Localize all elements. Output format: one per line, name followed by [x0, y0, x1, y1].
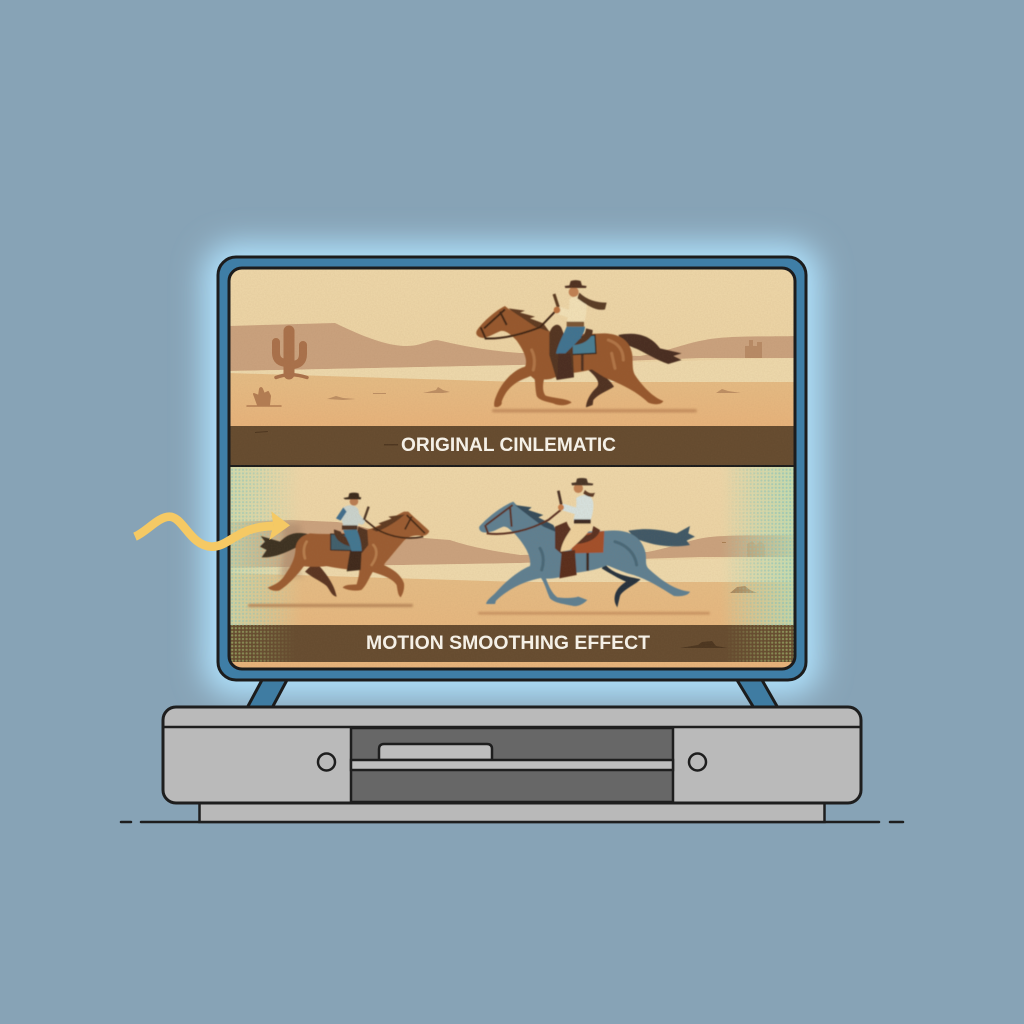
horse body	[268, 512, 429, 597]
shrub left	[247, 388, 281, 406]
belt blue rider	[574, 519, 591, 524]
bar mark	[255, 431, 398, 446]
screen border	[229, 268, 795, 669]
jeans small	[343, 529, 362, 552]
edge tint right	[720, 467, 796, 625]
tv bezel	[218, 257, 806, 680]
belt	[567, 322, 584, 327]
sky	[230, 270, 794, 371]
bar tuft lower	[680, 641, 728, 648]
saddle small	[334, 527, 368, 553]
console top edge line	[164, 726, 860, 728]
jeans	[556, 327, 585, 355]
bridle and reins	[481, 309, 555, 339]
label bar top	[228, 426, 796, 465]
scarf	[336, 507, 347, 521]
cactus	[276, 331, 307, 378]
halftone right	[725, 467, 796, 625]
arm small	[355, 513, 362, 522]
arm	[559, 311, 577, 316]
halftone left	[228, 467, 298, 625]
desert ground	[228, 373, 796, 426]
muscle shading blue	[540, 542, 637, 570]
halftone bar right	[725, 625, 796, 662]
console base	[200, 801, 824, 822]
saddle	[549, 325, 593, 380]
brown horse with rider	[476, 280, 682, 407]
boot	[558, 352, 566, 356]
small brown horse with rider	[260, 493, 429, 597]
trousers	[561, 523, 592, 552]
bridle and reins small	[365, 515, 425, 538]
hair blue rider	[583, 490, 595, 497]
hat	[565, 280, 587, 288]
shirt small	[341, 505, 359, 526]
ghost image of horse	[280, 524, 305, 577]
wavy yellow arrow	[135, 511, 290, 547]
panel divider	[230, 465, 794, 467]
ground tuft lower	[722, 542, 757, 593]
device on shelf	[379, 744, 492, 760]
belt small	[342, 525, 357, 530]
arm blue rider	[564, 507, 582, 513]
whip blue rider	[558, 491, 561, 505]
distant mesa lower	[228, 520, 796, 568]
hand blue rider	[558, 504, 564, 510]
right cactus distant	[745, 340, 762, 358]
saddle blanket	[570, 335, 596, 355]
muscle highlights	[532, 340, 623, 370]
head blue rider	[574, 484, 583, 493]
saddle blanket small	[331, 534, 353, 551]
hand	[554, 307, 560, 313]
head small	[350, 497, 358, 506]
far hind leg	[305, 562, 337, 597]
blue horse with rider	[479, 478, 695, 607]
halftone bar left	[228, 625, 298, 662]
saddle blue	[555, 522, 600, 554]
hat small	[343, 493, 361, 499]
cinch strap	[580, 354, 584, 372]
whip small	[364, 507, 369, 520]
screen texture	[228, 268, 796, 670]
boot blue rider	[559, 550, 577, 578]
bridle and reins blue	[485, 505, 561, 534]
mane	[508, 308, 549, 332]
ground line	[121, 821, 903, 823]
media console	[121, 707, 903, 822]
mane blue	[515, 505, 557, 533]
horse body	[476, 306, 663, 407]
tail blue	[628, 526, 695, 546]
label bar lower	[228, 625, 796, 662]
panel: motion smoothing	[228, 467, 796, 670]
mane small	[372, 514, 405, 532]
label: motion smoothing: MOTION SMOOTHING EFFECT	[366, 632, 650, 654]
left door knob	[318, 754, 335, 770]
tail with motion trail	[260, 533, 312, 557]
light sand band	[231, 365, 794, 382]
horse body blue	[479, 502, 690, 606]
tv stand legs	[247, 680, 778, 708]
right door knob	[689, 754, 706, 770]
console body	[163, 707, 861, 803]
blue horse shadow	[478, 612, 710, 614]
edge tint left	[228, 467, 303, 625]
shelf	[351, 760, 673, 770]
head	[569, 287, 579, 297]
muscle highlights small	[304, 542, 376, 565]
ghost cactus	[747, 541, 765, 557]
light sand band lower	[266, 562, 726, 582]
label: original: ORIGINAL CINLEMATIC	[401, 434, 616, 456]
far hind leg	[586, 365, 614, 407]
tail	[618, 334, 682, 364]
backlight glow	[214, 254, 810, 686]
cinch blue	[584, 553, 592, 571]
center compartment	[351, 728, 673, 802]
small horse shadow	[248, 604, 413, 607]
whip	[554, 294, 558, 307]
hair	[577, 293, 607, 310]
sky lower	[230, 467, 794, 568]
boot small	[347, 551, 362, 571]
ground tufts	[328, 387, 740, 400]
desert ground lower	[228, 573, 796, 670]
saddle blanket blue	[572, 531, 604, 553]
far hind leg blue	[602, 564, 641, 607]
tv screen	[228, 268, 796, 670]
shirt	[567, 297, 586, 323]
panel: original cinematic	[228, 268, 796, 465]
shirt blue rider	[573, 495, 593, 520]
horse shadow	[492, 409, 697, 412]
distant mesa	[228, 323, 796, 371]
hat blue rider	[571, 478, 593, 485]
